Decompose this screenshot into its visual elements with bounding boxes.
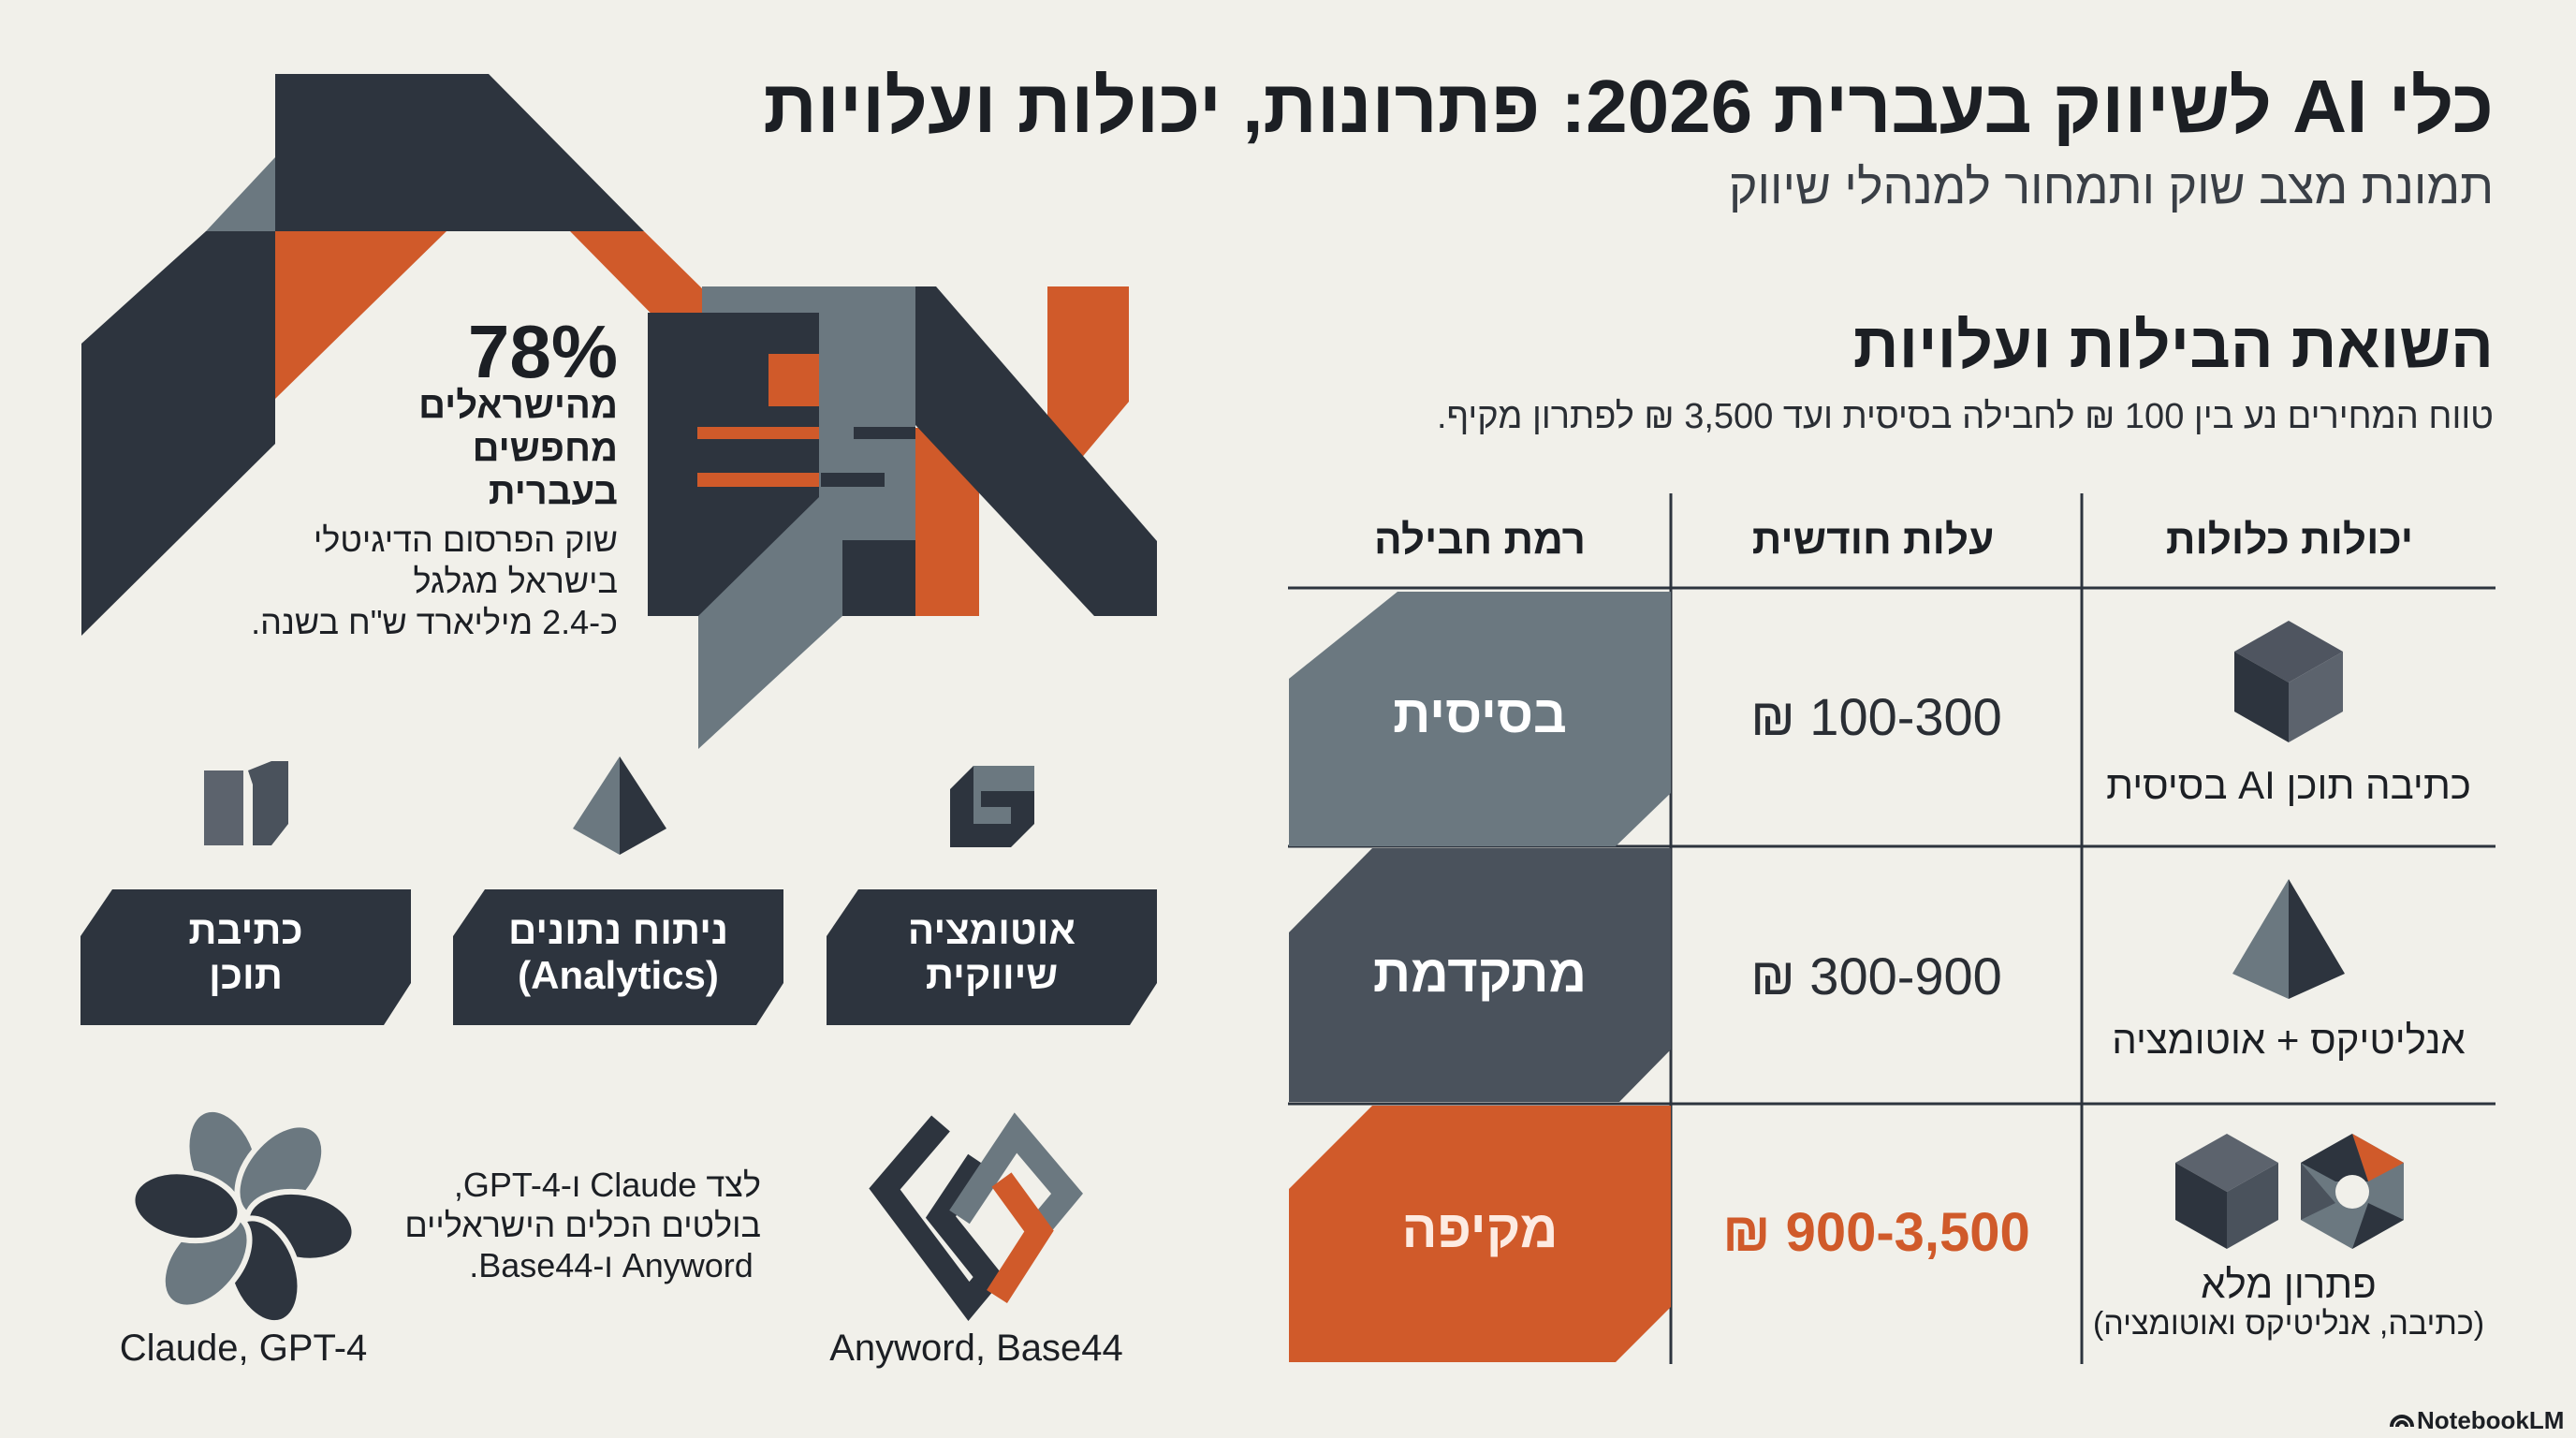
tool labels [120,1166,1123,1369]
category labels: כתיבת [188,908,303,952]
stat callout: כ-2.4 מיליארד ש"ח בשנה. [251,603,618,641]
table headers: רמת חבילה [1374,517,1586,563]
package labels: מתקדמת [1373,944,1587,1003]
category labels: שיווקית [926,953,1058,997]
table headers: יכולות כלולות [2166,517,2413,563]
table headers [1374,517,2413,563]
icon: content block [204,761,288,845]
category labels: (Analytics) [518,953,719,997]
stat callout: בעברית [489,471,618,512]
capabilities text: כתיבה תוכן AI בסיסית [2106,763,2471,807]
icon: pyramid row2 [2232,879,2345,999]
category boxes [80,889,1157,1025]
logo: anyword chevrons [885,1123,1067,1301]
stat callout: 78% [468,310,618,393]
category labels: אוטומציה [908,908,1076,952]
tool labels: בולטים הכלים הישראליים [404,1206,761,1244]
capabilities text [2093,763,2484,1342]
prices: 900-3,500 ₪ [1722,1202,2030,1263]
title: כלי AI לשיווק בעברית 2026: פתרונות, יכולות ועלויות [763,65,2494,148]
package shapes [1289,592,1671,1362]
section subtext: טווח המחירים נע בין 100 ₪ לחבילה בסיסית ועד 3,500 ₪ לפתרון מקיף. [1437,397,2494,436]
icon: automation G [950,766,1034,847]
stat callout: שוק הפרסום הדיגיטלי [314,521,618,559]
tool labels: Claude, GPT-4 [120,1328,367,1369]
category labels: תוכן [209,953,283,997]
capabilities text: פתרון מלא [2201,1262,2377,1306]
stat callout: מחפשים [473,428,618,469]
subtitle: תמונת מצב שוק ותמחור למנהלי שיווק [1729,160,2494,214]
notebooklm mark [2392,1416,2412,1427]
icon: cube row1 [2234,621,2343,742]
prices: 100-300 ₪ [1750,687,2002,746]
icon: pyramid analytics [573,756,666,855]
capabilities text: אנליטיקס + אוטומציה [2112,1018,2466,1062]
logo: claude flower [127,1099,359,1333]
tool labels: לצד Claude ו-GPT-4, [454,1166,761,1204]
left geometric art [81,74,1157,749]
stat callout: מהישראלים [418,385,618,426]
tool labels: Anyword, Base44 [829,1328,1123,1369]
stat callout [251,310,618,641]
table lines [1288,493,2496,1364]
category labels [188,908,1076,997]
notebooklm watermark: NotebookLM [2417,1406,2564,1434]
package labels: מקיפה [1402,1199,1558,1258]
package labels: בסיסית [1393,684,1567,743]
package labels [1373,684,1587,1258]
tool labels: Anyword ו-Base44. [469,1246,754,1284]
stat callout: בישראל מגלגל [413,562,618,600]
prices: 300-900 ₪ [1750,946,2002,1005]
prices [1722,687,2030,1263]
section heading: השואת הבילות ועלויות [1853,310,2494,381]
table headers: עלות חודשית [1752,517,1994,563]
category labels: ניתוח נתונים [508,908,728,952]
capabilities text: (כתיבה, אנליטיקס ואוטומציה) [2093,1306,2484,1342]
icon: cube + aperture row3 [2175,1134,2404,1249]
